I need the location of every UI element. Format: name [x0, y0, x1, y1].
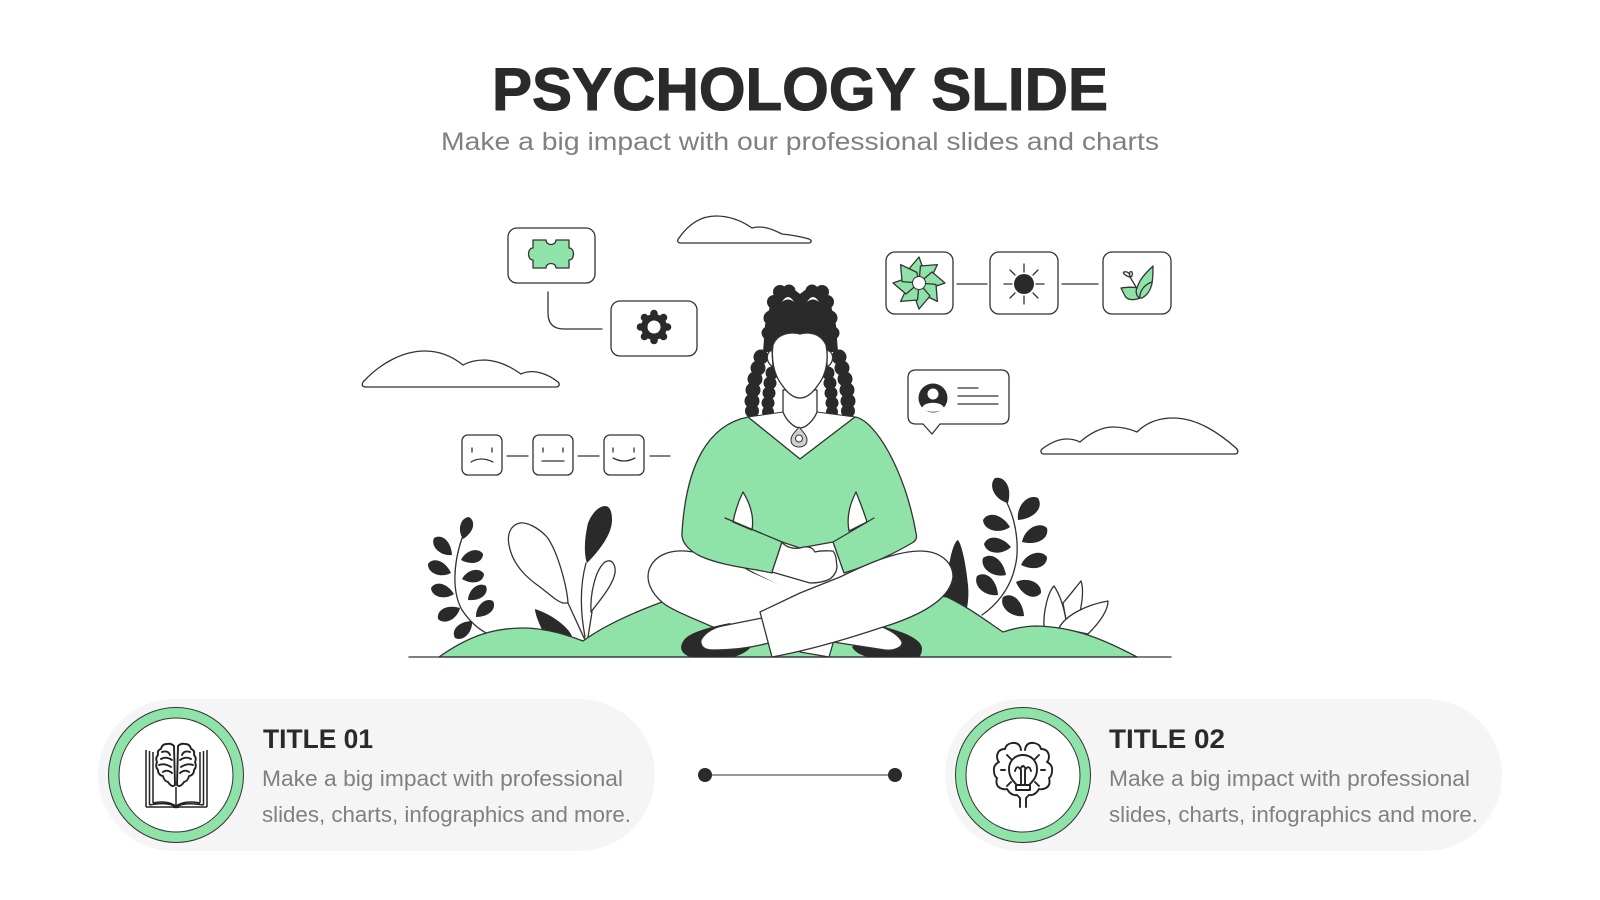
title: PSYCHOLOGY SLIDE: [492, 56, 1108, 123]
person: [648, 284, 953, 657]
back foot and shoe: [790, 625, 922, 657]
card: sun: [990, 252, 1058, 314]
gear card: [611, 301, 697, 356]
icon: brain with lightbulb: [994, 743, 1052, 807]
left inner braid: [766, 366, 778, 380]
speech bubble with profile: [908, 370, 1009, 434]
right inner braid: [822, 366, 834, 380]
body text: slides, charts, infographics and more.: [262, 802, 631, 827]
back leg: [648, 551, 850, 650]
face: sad: [462, 435, 502, 475]
icon: brain book: [146, 744, 207, 808]
face: happy: [604, 435, 644, 475]
neck: [783, 390, 817, 428]
icon: gear: [637, 310, 671, 344]
left outer braid: [754, 350, 768, 364]
panel: title 01: [98, 699, 655, 851]
body text: [262, 766, 631, 827]
cloud: right: [1041, 418, 1238, 454]
card: pinwheel flower: [886, 252, 953, 314]
card: leaves: [1103, 252, 1171, 314]
belly white: [753, 572, 836, 595]
chest: [748, 412, 855, 459]
left fern plant: [426, 515, 497, 643]
puzzle card: [508, 228, 595, 283]
cloud: top: [678, 216, 811, 243]
icon ring: [108, 708, 244, 842]
heading: TITLE 02: [1109, 724, 1225, 754]
connector between panels: [698, 768, 902, 782]
heading: TITLE 01: [263, 724, 373, 754]
ground line: [409, 656, 1171, 658]
right fern plant and spike leaf: [940, 474, 1051, 622]
front foot and shoe: [681, 618, 772, 657]
braids and hair: [744, 284, 856, 418]
pendant: [791, 427, 807, 447]
icon: avatar: [918, 384, 948, 412]
subtitle: Make a big impact with our professional slides and charts: [441, 128, 1159, 156]
right white leaves: [1044, 581, 1108, 634]
left arm gap: [733, 492, 753, 530]
right outer braid: [832, 350, 846, 364]
face: [772, 333, 827, 398]
connector: puzzle to gear: [548, 292, 602, 329]
illustration: meditating person scene: [362, 216, 1238, 657]
icon: puzzle piece: [528, 240, 574, 268]
ground hills: [409, 590, 1171, 657]
body text: slides, charts, infographics and more.: [1109, 802, 1478, 827]
front leg: [760, 551, 953, 657]
panel: title 02: [945, 699, 1502, 851]
mood faces row: [462, 435, 670, 475]
ears: [767, 350, 833, 367]
icon ring: [956, 708, 1090, 842]
icon row: flower, sun, leaf: [886, 252, 1171, 314]
center left plant: [508, 506, 615, 640]
right arm gap: [848, 492, 867, 531]
cloud: left: [362, 351, 559, 387]
body text: Make a big impact with professional: [1109, 766, 1470, 791]
face: neutral: [533, 435, 573, 475]
body text: [1109, 766, 1478, 827]
hands: [772, 542, 837, 583]
body text: Make a big impact with professional: [262, 766, 623, 791]
sweater: [682, 417, 917, 573]
